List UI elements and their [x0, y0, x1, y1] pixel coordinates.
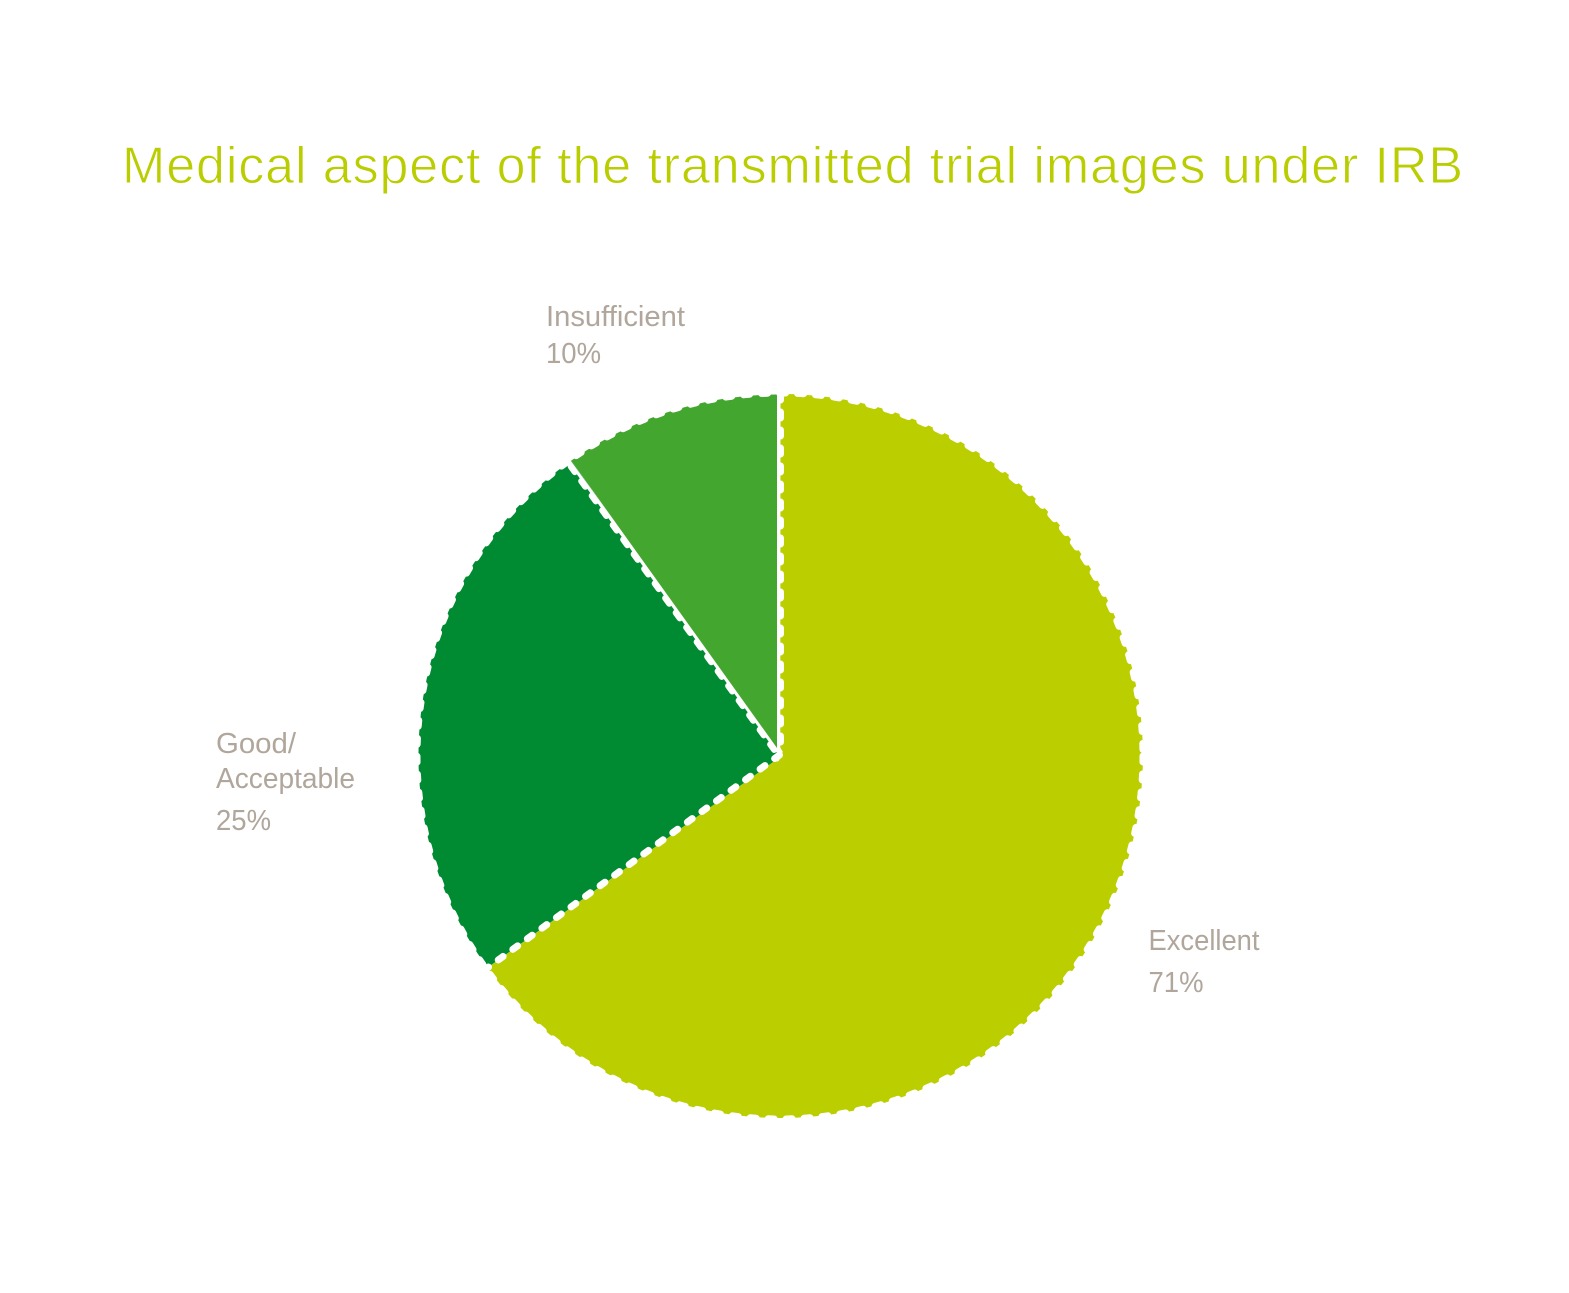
- label: Excellent: 71%: [1148, 967, 1204, 999]
- slice: Insufficient: [571, 394, 777, 748]
- label: Insufficient: 10%: [546, 338, 601, 370]
- label: Good/Acceptable: [216, 728, 355, 837]
- label: Good/Acceptable: Acceptable: [216, 763, 355, 795]
- label: Insufficient: Insufficient: [546, 301, 685, 333]
- slice: Excellent: [488, 394, 1143, 1118]
- title: Medical aspect of the transmitted trial images under IRB: [122, 137, 1463, 195]
- scalloped outer edge: [417, 393, 1143, 1119]
- pie chart: [417, 393, 1143, 1119]
- label: Excellent: [1148, 925, 1260, 999]
- slice: Good/Acceptable: [418, 461, 780, 968]
- label: Good/Acceptable: 25%: [216, 805, 271, 837]
- label: Good/Acceptable: Good/: [216, 728, 297, 760]
- label: Insufficient: [546, 301, 685, 370]
- label: Excellent: Excellent: [1148, 925, 1260, 957]
- dashed slice separators: [488, 394, 780, 968]
